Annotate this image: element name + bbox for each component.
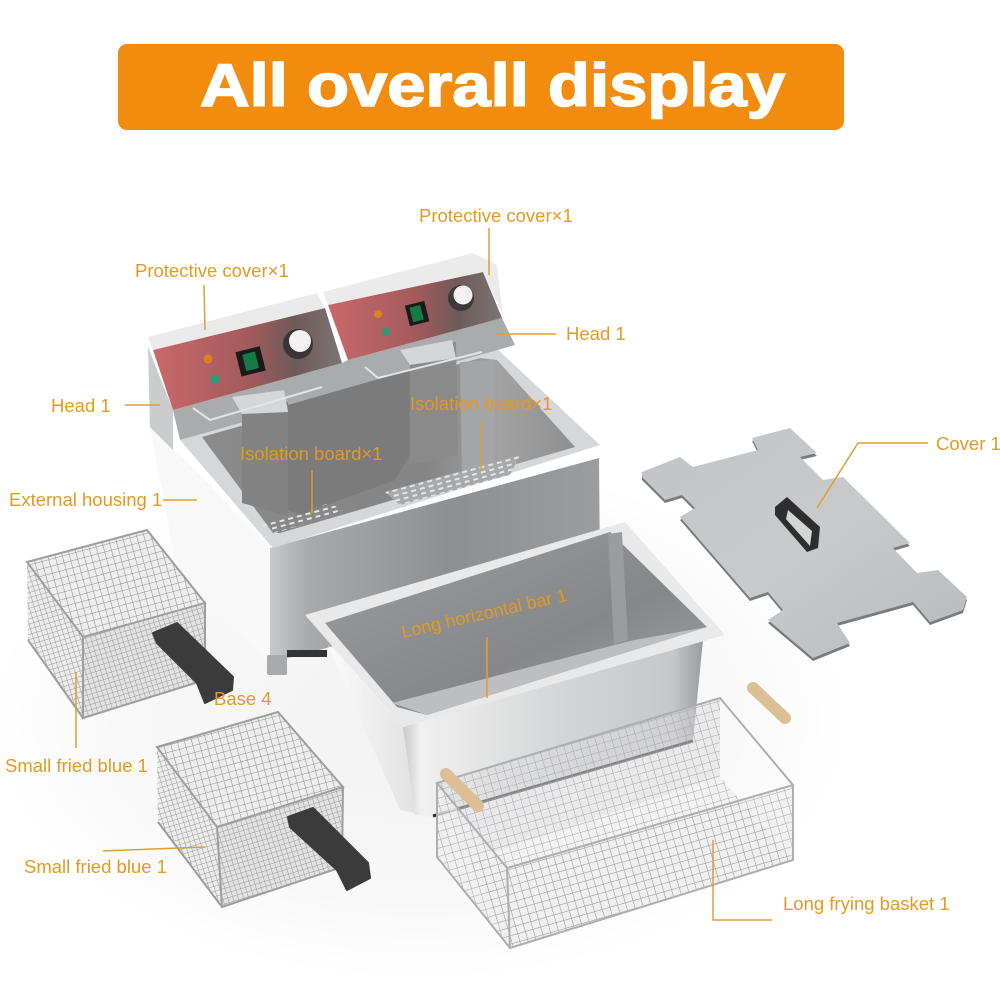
labels: Small fried blue 1 [24, 856, 167, 877]
pan rim [305, 522, 725, 727]
board brackets [232, 390, 288, 414]
illustration: long frying basket [437, 688, 793, 948]
labels: Long frying basket 1 [783, 893, 950, 914]
pan front [403, 640, 703, 817]
fryer foot [267, 650, 327, 675]
fryer tank [202, 358, 575, 533]
right controls [374, 285, 474, 336]
labels: Head 1 [566, 323, 626, 344]
labels: Protective cover×1 [419, 205, 573, 226]
head side [148, 347, 173, 450]
isolation board right [410, 342, 458, 465]
illustration: small basket 1 [27, 530, 233, 718]
labels [5, 205, 1000, 914]
illustration: long pan [305, 522, 725, 817]
labels: External housing 1 [9, 489, 162, 510]
cover handle [775, 497, 820, 552]
labels: Protective cover×1 [135, 260, 289, 281]
labels: Long horizontal bar 1 [399, 585, 569, 642]
protective cover right [323, 253, 503, 315]
labels: Small fried blue 1 [5, 755, 148, 776]
illustration: double-tank fryer [148, 253, 600, 675]
pan floor [392, 627, 707, 715]
labels: Head 1 [51, 395, 111, 416]
labels: Base 4 [214, 688, 272, 709]
basket rest plates [385, 455, 520, 505]
protective cover left [148, 293, 325, 350]
back wall band [173, 318, 515, 440]
handle [288, 808, 370, 890]
illustration: small basket 2 [157, 712, 370, 907]
head right control panel [328, 272, 502, 360]
handle [153, 623, 233, 703]
wooden handles [446, 774, 478, 806]
cover plate [642, 428, 967, 658]
labels: Isolation board×1 [240, 443, 382, 464]
isolation board left [242, 402, 288, 516]
pan interior [325, 532, 707, 715]
fryer front face [270, 458, 600, 663]
pan bottom edge [433, 741, 693, 816]
hanger rails [193, 352, 482, 420]
fryer top rim [180, 345, 600, 548]
labels: Cover 1 [936, 433, 1000, 454]
floor shading [0, 460, 850, 980]
tank highlight column [460, 360, 495, 478]
left controls [204, 329, 313, 384]
illustration: lid cover [642, 428, 967, 661]
head left control panel [153, 308, 342, 410]
title banner: All overall display [200, 52, 786, 119]
cover edge [642, 431, 967, 661]
title banner [118, 44, 844, 130]
labels: Isolation board×1 [410, 393, 552, 414]
label leader lines [76, 228, 928, 920]
divider wall [288, 370, 410, 515]
fryer white side housing [150, 427, 270, 665]
pan side [328, 645, 433, 817]
